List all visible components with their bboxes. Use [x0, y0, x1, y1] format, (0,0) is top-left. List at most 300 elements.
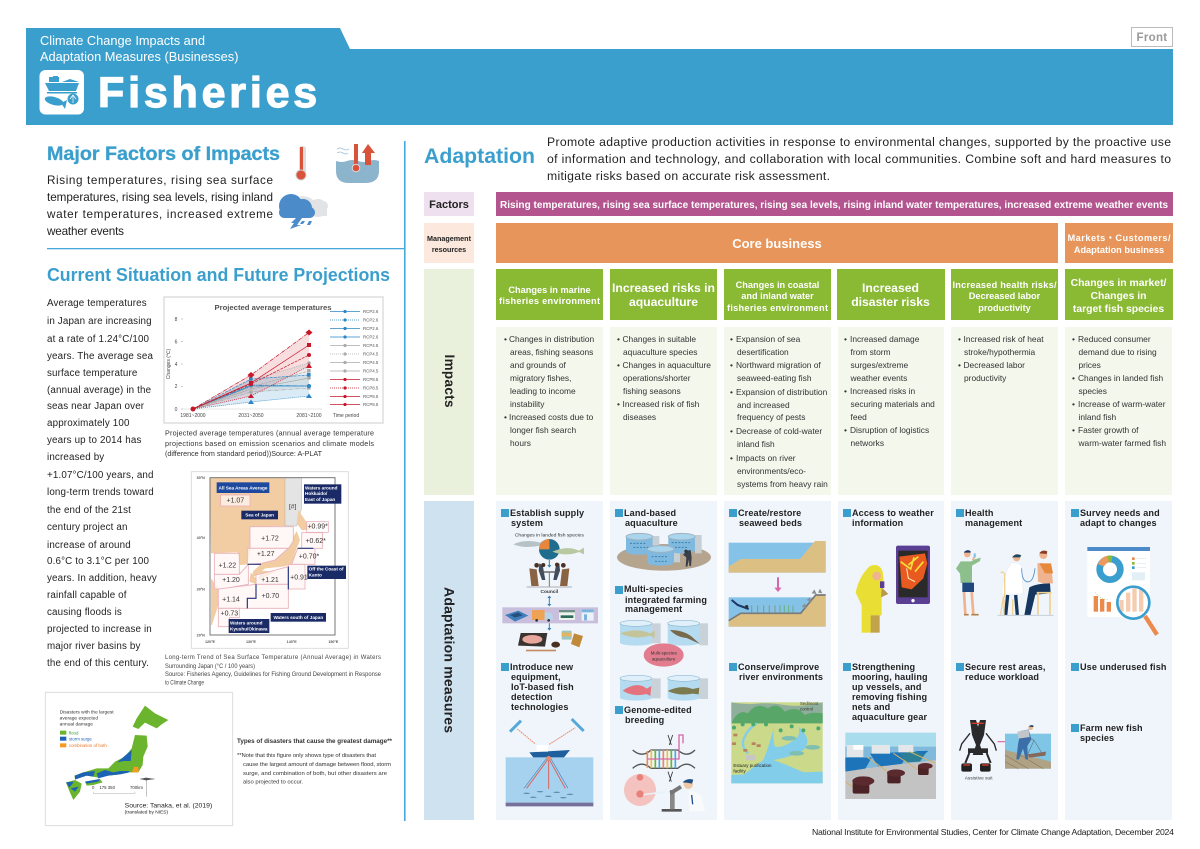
impact list 3: frequency of pests — [737, 412, 805, 422]
impact list 1 — [496, 327, 603, 495]
impact list 3: seaweed-eating fish — [737, 373, 812, 383]
icon: storm cloud — [279, 194, 328, 229]
impact heading 1 — [496, 269, 603, 320]
illustration: multi-species tanks: Multi-species — [651, 651, 678, 656]
chart: projected average temperatures: Time period — [333, 413, 359, 419]
caption: temperature chart: (difference from standard period))Source: A-PLAT — [165, 449, 323, 458]
label: adaptation measures: Adaptation measures — [442, 587, 458, 733]
text: situation body: projected to increase in — [47, 624, 152, 635]
impact heading 5: Decreased labor — [969, 291, 1041, 301]
text: situation body: at a rate of 1.24°C/100 — [47, 334, 150, 345]
impact list 4: surges/extreme — [850, 360, 909, 370]
row: factors: Factors — [429, 199, 469, 211]
measure: use underused fish: Use underused fish — [1080, 662, 1167, 672]
measure: weather information: Access to weather — [852, 508, 934, 518]
impact list 6: warm-water farmed fish — [1078, 438, 1166, 448]
impact list 6: Faster growth of — [1078, 425, 1139, 435]
header subtitle — [40, 33, 238, 64]
impact list 6: • — [1072, 373, 1075, 383]
map: sea surface temperature trend: +0.91 — [290, 574, 308, 581]
map: disaster types in Japan: 0 — [92, 785, 95, 790]
chart legend: RCP4.5 — [363, 360, 379, 365]
text: situation body: (annual average) in the — [47, 385, 152, 396]
impact heading 2 — [610, 269, 717, 320]
impact list 6 — [1065, 327, 1172, 495]
impact list 3: Expansion of distribution — [736, 387, 828, 397]
chart: projected average temperatures: 2031~2050 — [238, 413, 264, 419]
illustration: river environment — [731, 701, 823, 783]
impact list 2 — [610, 327, 717, 495]
impact heading 6: Changes in — [1090, 291, 1147, 302]
label: impacts: Impacts — [442, 354, 457, 408]
row: factors — [424, 192, 1173, 216]
column: health measures — [951, 501, 1058, 820]
impact list 4: weather events — [850, 373, 907, 383]
map: sea surface temperature trend: +1.72 — [261, 535, 279, 542]
text: situation body: increased by — [47, 452, 104, 463]
illustration: supply system — [502, 532, 598, 651]
map: sea surface temperature trend: 150°E — [328, 640, 339, 644]
text: situation body: years. In addition, heavy — [47, 573, 157, 584]
map: disaster types in Japan: 700km — [130, 785, 143, 790]
row: adaptation measures — [424, 501, 1172, 820]
measure: river environments — [729, 662, 823, 682]
text: situation body: 0.6°C to 3.1°C per 100 — [47, 556, 149, 567]
chart legend: RCP8.5 — [363, 377, 379, 382]
measure: multi-species aquaculture — [615, 584, 707, 614]
label: impacts — [424, 269, 474, 495]
measure: multi-species aquaculture: management — [625, 604, 682, 614]
map: sea surface temperature trend: +0.73 — [220, 610, 238, 617]
row: management resources: resources — [432, 245, 466, 254]
measure: introduce new equipment: IoT-based fish — [511, 682, 574, 692]
illustration: seaweed restoration — [729, 541, 826, 627]
illustration: river environment: control — [800, 707, 813, 712]
measure: land-based aquaculture: aquaculture — [625, 518, 678, 528]
impact list 2: Changes in aquaculture — [622, 360, 711, 370]
illustration: assistive suit — [960, 720, 1051, 781]
text: adaptation summary — [547, 135, 1171, 183]
impact heading 5 — [951, 269, 1058, 320]
caption: sea temperature map: Surrounding Japan (°C / 100 years) — [165, 664, 255, 670]
illustration: multi-species tanks — [620, 620, 708, 701]
impact list 4: Increased damage — [850, 334, 920, 344]
caption: disaster types: also projected to occur. — [243, 780, 303, 786]
map: sea surface temperature trend: +0.62* — [305, 538, 326, 545]
measure: seaweed beds: seaweed beds — [739, 518, 802, 528]
map: sea surface temperature trend: +1.21 — [261, 577, 279, 584]
measure: survey needs — [1071, 508, 1160, 528]
caption: sea temperature map: Source: Fisheries Agency, Guidelines for Fishing Ground Development in Response — [165, 672, 382, 678]
impact list 2: diseases — [623, 412, 656, 422]
measure: establish supply system: Establish supply — [510, 508, 585, 518]
map: disaster types in Japan: average expected — [60, 715, 98, 721]
impact list 1: Increased costs due to — [509, 412, 594, 422]
illustration: supply system: Changes in landed fish species — [515, 532, 584, 538]
measure: multi-species aquaculture: Multi-species — [624, 584, 683, 594]
impact heading 4 — [837, 269, 945, 320]
chart legend: RCP4.5 — [363, 368, 379, 374]
measure: introduce new equipment — [501, 662, 574, 712]
illustration: survey dashboard — [1087, 547, 1157, 635]
impact list 4: • — [844, 425, 847, 435]
measure: river environments: Conserve/improve — [738, 662, 819, 672]
map: sea surface temperature trend: East of Japan — [305, 497, 335, 502]
measure: land-based aquaculture: Land-based — [624, 508, 676, 518]
impact list 3: Expansion of sea — [736, 334, 801, 344]
impact heading 2: Increased risks in — [612, 281, 715, 295]
map: sea surface temperature trend: 40°N — [197, 536, 205, 540]
impact heading 1: Changes in marine — [508, 285, 591, 295]
illustration: moored boats — [845, 733, 936, 799]
map: sea surface temperature trend: 140°E — [287, 640, 297, 644]
impact heading 3: Changes in coastal — [736, 280, 819, 290]
icon: rising sea — [336, 144, 379, 183]
chart: projected average temperatures: 2081~2100 — [296, 413, 322, 419]
map: disaster types in Japan: combination of both — [69, 743, 107, 748]
measure: introduce new equipment: equipment, — [511, 672, 561, 682]
impact list 3: • — [730, 426, 733, 436]
impact list 1: longer fish search — [510, 425, 576, 435]
heading: current situation: Current Situation and Future Projections — [47, 264, 390, 285]
column: aquaculture measures — [610, 501, 717, 820]
heading: adaptation: Adaptation — [424, 144, 535, 168]
measure: introduce new equipment: technologies — [511, 702, 569, 712]
markets bar: Adaptation business — [1074, 245, 1164, 255]
impact list 2: Changes in suitable — [622, 334, 696, 344]
impact list 3 — [724, 327, 831, 495]
panel: adaptation intro — [424, 135, 1171, 183]
impact list 3: • — [730, 453, 733, 463]
map: sea surface temperature trend: +1.07 — [226, 498, 244, 505]
impact list 1: and grounds of — [510, 360, 567, 370]
chart: projected average temperatures: 6 — [175, 340, 178, 346]
panel: major factors of impacts — [46, 143, 379, 238]
impact list 3: Northward migration of — [736, 360, 821, 370]
text: factors list: temperatures, rising sea levels, rising inland — [47, 191, 273, 204]
measure: weather information: information — [852, 518, 903, 528]
map: sea surface temperature trend: 30°N — [197, 587, 205, 591]
measure: farm new fish species: species — [1080, 733, 1114, 743]
label: adaptation measures — [424, 501, 474, 820]
measure: mooring and hauling — [843, 662, 928, 722]
impact list 5: Increased risk of heat — [964, 334, 1044, 344]
text: adaptation summary: of information and technology, and collaboration with local communities. Combine soft and hard measures to — [547, 152, 1171, 166]
impact list 4: feed — [850, 412, 867, 422]
map: disaster types in Japan: Disasters with the largest — [60, 709, 114, 715]
chart: projected average temperatures: 4 — [175, 362, 178, 368]
map: disaster types in Japan: (translated by NIES) — [125, 809, 169, 815]
caption: disaster types: surge, and combination of both, but other disasters are — [243, 771, 388, 777]
text: situation body: rainfall capable of — [47, 590, 127, 601]
measure: multi-species aquaculture: integrated farming — [625, 595, 707, 605]
measure: seaweed beds: Create/restore — [738, 508, 801, 518]
text: situation body — [47, 298, 157, 669]
measure: rest areas and workload: reduce workload — [965, 672, 1039, 682]
caption: disaster types: Types of disasters that cause the greatest damage** — [237, 738, 392, 745]
chart legend: RCP2.6 — [363, 309, 379, 314]
measure: genome-edited breeding — [615, 705, 692, 725]
map: sea surface temperature trend: 130°E — [246, 640, 257, 644]
measure: mooring and hauling: mooring, hauling — [852, 672, 928, 682]
front tag: Front — [1137, 32, 1167, 44]
impact list 6: • — [1072, 399, 1075, 409]
header banner — [26, 28, 1173, 125]
header subtitle: Adaptation Measures (Businesses) — [40, 49, 238, 64]
impact list 1: instability — [510, 399, 545, 409]
impact list 1: • — [504, 412, 507, 422]
chart legend: RCP2.6 — [363, 326, 379, 331]
impact list 3: Impacts on river — [736, 453, 796, 463]
impact list 5: • — [958, 360, 961, 370]
row: management resources: Management — [427, 234, 472, 243]
impact list 6: inland fish — [1078, 412, 1117, 422]
measure: survey needs: Survey needs and — [1080, 508, 1160, 518]
column: disaster measures — [838, 501, 944, 820]
map: sea surface temperature trend: Waters around — [305, 486, 338, 491]
front tag — [1132, 28, 1172, 46]
map: sea surface temperature trend: Kyushu/Okinawa — [230, 627, 268, 632]
impact list 5: productivity — [964, 373, 1007, 383]
markets bar: Markets・Customers/ — [1068, 233, 1171, 243]
row: management resources — [424, 223, 1173, 263]
impact list 2: • — [617, 360, 620, 370]
impact list 5: Decreased labor — [964, 360, 1025, 370]
column: coastal and river measures — [724, 501, 831, 820]
measure: river environments: river environments — [739, 672, 823, 682]
illustration: multi-species tanks: aquaculture — [652, 657, 676, 662]
impact list 2: operations/shorter — [623, 373, 691, 383]
text: factors list — [46, 174, 273, 238]
illustration: land-based tanks — [617, 533, 711, 571]
impact list 4: • — [844, 386, 847, 396]
chart: projected average temperatures: 2 — [175, 384, 178, 390]
chart legend: RCP8.5 — [363, 394, 379, 399]
map: sea surface temperature trend: [#] — [289, 503, 297, 510]
text: situation body: century project an — [47, 522, 128, 533]
impact list 6: Reduced consumer — [1078, 334, 1151, 344]
map: sea surface temperature trend: All Sea Areas Average — [219, 485, 268, 490]
impact list 6: Increase of warm-water — [1078, 399, 1166, 409]
chart legend: RCP2.6 — [363, 334, 379, 340]
impact list 1: • — [504, 334, 507, 344]
caption: sea temperature map — [165, 655, 382, 686]
map: sea surface temperature trend: Kanto — [309, 572, 322, 577]
chart: projected average temperatures: 1981~2000 — [180, 413, 206, 419]
measure: health management — [956, 508, 1022, 528]
impact list 4: • — [844, 334, 847, 344]
text: situation body: causing floods is — [47, 607, 122, 618]
illustration: river environment: Sediment — [800, 701, 819, 706]
impact list 5: • — [958, 334, 961, 344]
measure: rest areas and workload: Secure rest areas, — [965, 662, 1046, 672]
map: sea surface temperature trend: +1.22 — [218, 562, 236, 569]
measure: farm new fish species: Farm new fish — [1080, 723, 1143, 733]
impact heading 5: productivity — [978, 303, 1032, 313]
illustration: river environment: facility — [733, 769, 747, 774]
illustration: weather tablet and raincoat — [856, 546, 930, 633]
map: disaster types in Japan: Source: Tanaka, et al. (2019) — [125, 802, 212, 809]
illustration: genome editing — [624, 735, 705, 812]
illustration: supply system: Council — [540, 589, 558, 595]
measure: seaweed beds — [729, 508, 802, 528]
map: sea surface temperature trend: +1.27 — [257, 551, 275, 558]
column: supply and equipment measures — [496, 501, 603, 820]
map: disaster types in Japan: storm surge — [69, 737, 92, 742]
footer credit: National Institute for Environmental Studies, Center for Climate Change Adaptation, December 2024 — [812, 827, 1174, 837]
map: sea surface temperature trend: +0.70* — [299, 553, 319, 560]
text: situation body: in Japan are increasing — [47, 316, 152, 327]
text: factors list: water temperatures, increased extreme — [46, 208, 273, 221]
map: disaster types in Japan: flood — [69, 730, 79, 735]
header subtitle: Climate Change Impacts and — [40, 33, 205, 48]
impact list 3: systems from heavy rain — [737, 479, 828, 489]
text: situation body: the end of this century. — [47, 658, 149, 669]
impact heading 4: disaster risks — [851, 295, 930, 309]
chart: projected average temperatures: 8 — [175, 317, 178, 323]
illustration: river environment: Estuary purification — [733, 763, 772, 768]
main title: Fisheries — [98, 69, 321, 117]
impact heading 2: aquaculture — [629, 295, 698, 309]
map: sea surface temperature trend: Hokkaido/ — [305, 491, 328, 496]
impact heading 6 — [1065, 269, 1173, 320]
chart: projected average temperatures: Projected average temperatures — [214, 303, 332, 312]
chart legend: RCP8.5 — [363, 402, 379, 407]
measure: mooring and hauling: removing fishing — [852, 692, 927, 702]
caption: sea temperature map: Long-term Trend of Sea Surface Temperature (Annual Average) in Waters — [165, 655, 381, 661]
text: situation body: seas near Japan over — [47, 401, 145, 412]
measure: farm new fish species — [1071, 723, 1143, 743]
map: sea surface temperature trend: +1.14 — [222, 596, 240, 603]
map: sea surface temperature trend: Waters around — [230, 621, 263, 626]
measure: introduce new equipment: Introduce new — [510, 662, 574, 672]
text: situation body: surface temperature — [47, 368, 138, 379]
impact list 2: fishing seasons — [623, 386, 681, 396]
impact list 4: Disruption of logistics — [850, 425, 929, 435]
impact list 3: • — [730, 360, 733, 370]
map: sea surface temperature trend: +0.70 — [261, 593, 279, 600]
row: impacts — [424, 269, 1173, 495]
impact heading 6: Changes in market/ — [1071, 278, 1167, 289]
impact list 4 — [838, 327, 944, 495]
chart: projected average temperatures — [164, 297, 383, 423]
caption: disaster types: cause the largest amount of damage between flood, storm — [243, 762, 391, 768]
map: sea surface temperature trend: Sea of Japan — [245, 513, 274, 518]
impact list 2: aquaculture species — [623, 347, 698, 357]
column: market measures — [1065, 501, 1172, 820]
impact heading 3: fisheries environment — [727, 303, 828, 313]
chart: projected average temperatures: Changes (℃) — [166, 348, 172, 379]
impact list 4: networks — [850, 438, 884, 448]
measure: establish supply system: system — [511, 518, 543, 528]
caption: temperature chart — [165, 428, 374, 458]
map: sea surface temperature trend: Off the Coast of — [309, 567, 344, 572]
icon: thermometer — [296, 146, 306, 180]
impact list 6: species — [1078, 386, 1107, 396]
impact heading 4: Increased — [862, 281, 919, 295]
measure: health management: Health — [965, 508, 994, 518]
impact list 4: from storm — [850, 347, 891, 357]
chart legend: RCP8.5 — [363, 386, 379, 390]
map: sea surface temperature trend: Waters south of Japan — [273, 615, 323, 620]
heading: major factors: Major Factors of Impacts — [47, 143, 280, 165]
chart legend: RCP4.5 — [363, 343, 379, 348]
icon: fisheries boat and fish — [40, 70, 84, 114]
text: situation body: approximately 100 — [47, 418, 130, 429]
impact list 6: • — [1072, 334, 1075, 344]
measure: genome-edited breeding: breeding — [625, 715, 664, 725]
impact list 4: securing materials and — [850, 399, 935, 409]
text: factors list: Rising temperatures, rising sea surface — [47, 174, 273, 187]
measure: rest areas and workload — [956, 662, 1046, 682]
impact list 1: Changes in distribution — [509, 334, 595, 344]
map: sea surface temperature trend: +0.99* — [307, 524, 328, 531]
impact list 1: leading to income — [510, 386, 576, 396]
panel: current situation and future projections — [45, 264, 392, 826]
text: factors list: weather events — [46, 225, 124, 238]
impact list 1: areas, fishing seasons — [510, 347, 593, 357]
map: sea surface temperature trend — [191, 472, 348, 648]
row: factors: Rising temperatures, rising sea surface temperatures, rising sea levels, rising inland water temperatures, increased extreme weather events — [500, 200, 1168, 211]
illustration: assistive suit: Assistive suit — [965, 775, 993, 781]
impact heading 3 — [724, 269, 831, 320]
measure: land-based aquaculture — [615, 508, 678, 528]
caption: disaster types: **Note that this figure only shows type of disasters that — [237, 753, 376, 759]
measure: mooring and hauling: aquaculture gear — [852, 712, 928, 722]
caption: disaster types — [237, 738, 392, 786]
text: situation body: long-term trends toward — [47, 487, 154, 498]
measure: introduce new equipment: detection — [511, 692, 553, 702]
measure: mooring and hauling: Strengthening — [852, 662, 915, 672]
impact list 2: Increased risk of fish — [622, 399, 700, 409]
text: adaptation summary: mitigate risks based on accurate risk assessment. — [547, 169, 830, 183]
impact list 3: inland fish — [737, 439, 775, 449]
impact list 6: prices — [1078, 360, 1101, 370]
impact list 5 — [951, 327, 1058, 495]
impact list 4: Increased risks in — [850, 386, 916, 396]
map: disaster types in Japan: 175 350 — [99, 785, 116, 790]
map: disaster types in Japan: annual damage — [60, 721, 93, 727]
caption: sea temperature map: to Climate Change — [165, 680, 205, 686]
text: situation body: +1.07°C/100 years, and — [47, 470, 154, 481]
map: sea surface temperature trend: 20°N — [197, 633, 205, 637]
map: sea surface temperature trend: +1.20 — [222, 577, 240, 584]
impact list 1: migratory fishes, — [510, 373, 571, 383]
map: sea surface temperature trend: 50°N — [197, 476, 205, 480]
impact list 6: Changes in landed fish — [1078, 373, 1164, 383]
impact list 3: and increased — [737, 400, 790, 410]
core business bar — [496, 223, 1058, 263]
impact list 5: stroke/hypothermia — [964, 347, 1036, 357]
measure: mooring and hauling: up vessels, and — [852, 682, 922, 692]
measure: health management: management — [965, 518, 1022, 528]
text: situation body: Average temperatures — [47, 298, 147, 309]
core business bar: Core business — [732, 236, 822, 251]
text: adaptation summary: Promote adaptive production activities in response to environmental changes, supported by the proactive use — [547, 135, 1171, 149]
markets bar — [1065, 223, 1173, 263]
impact list 2: • — [617, 399, 620, 409]
measure: establish supply system — [501, 508, 585, 528]
caption: temperature chart: Projected average temperatures (annual average temperature — [165, 428, 374, 438]
impact heading 6: target fish species — [1073, 304, 1164, 315]
measure: weather information — [843, 508, 934, 528]
impact list 6: demand due to rising — [1078, 347, 1157, 357]
text: situation body: years. The average sea — [47, 351, 153, 362]
measure: mooring and hauling: nets and — [852, 702, 890, 712]
chart legend: RCP2.6 — [363, 318, 379, 322]
measure: survey needs: adapt to changes — [1080, 518, 1157, 528]
impact list 3: environments/eco- — [737, 466, 806, 476]
